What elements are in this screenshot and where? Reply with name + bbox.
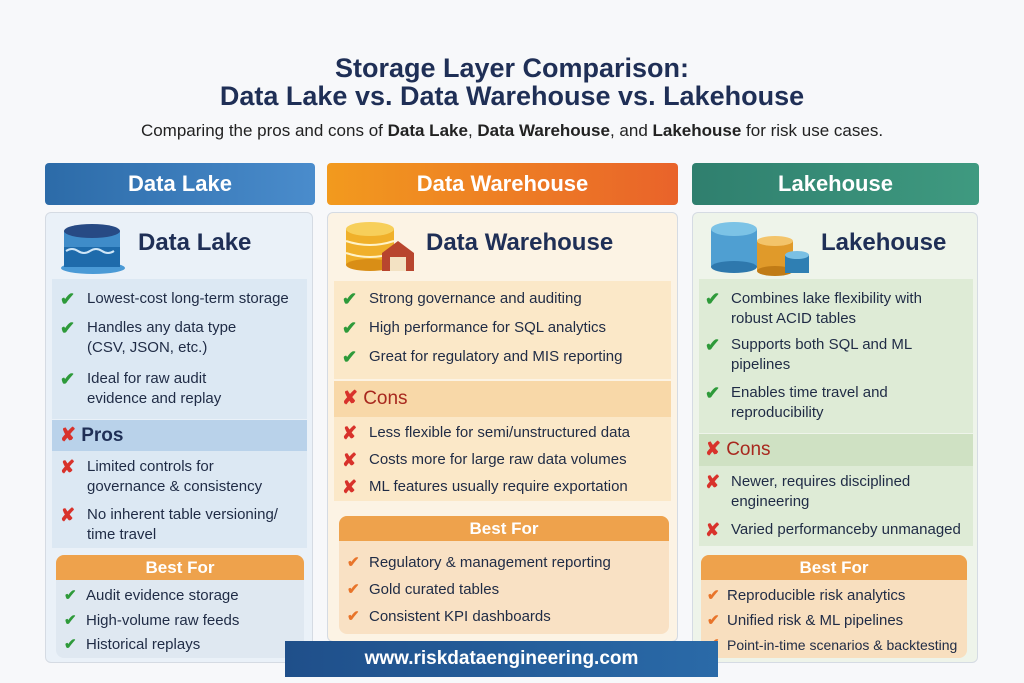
best for: Reproducible risk analytics [727,587,905,604]
pros list: Strong governance and auditing [369,290,582,307]
pros list: ✔ [705,335,720,355]
best for: Consistent KPI dashboards [369,608,551,625]
best for: Unified risk & ML pipelines [727,612,903,629]
pros list: Ideal for raw audit [87,370,206,387]
pros list: ✔ [342,318,357,338]
cons header: ✘ Cons [342,388,408,409]
pros list: ✔ [705,383,720,403]
icon: lake cylinder [61,224,125,274]
header: data lake [45,163,315,205]
pros list: evidence and replay [87,390,221,407]
pros list: High performance for SQL analytics [369,319,606,336]
cons list: engineering [731,493,809,510]
cons list: Limited controls for [87,458,214,475]
cons list: ✘ [342,450,357,470]
cons list: Newer, requires disciplined [731,473,910,490]
best for: ✔ [64,636,77,653]
cons list: ✘ [342,423,357,443]
best for: ✔ [347,581,360,598]
icon: warehouse db [346,222,414,271]
panel title: Lakehouse [821,229,946,256]
pros list: Great for regulatory and MIS reporting [369,348,622,365]
cons list: ✘ [705,472,720,492]
footer url: www.riskdataengineering.com [365,648,638,669]
best for [701,555,967,658]
cons list: Costs more for large raw data volumes [369,451,627,468]
panel: data lake [45,212,313,663]
cons list: governance & consistency [87,478,262,495]
pros list: reproducibility [731,404,824,421]
best for: ✔ [64,587,77,604]
best for: Gold curated tables [369,581,499,598]
header: data warehouse [327,163,678,205]
pros list: pipelines [731,356,790,373]
best for [56,555,304,658]
cons list: Varied performanceby unmanaged [731,521,961,538]
panel: lakehouse [692,212,978,663]
pros list: ✔ [342,289,357,309]
best for: Point-in-time scenarios & backtesting [727,637,957,653]
best for: ✔ [707,587,720,604]
best for: High-volume raw feeds [86,612,239,629]
best for: ✔ [347,554,360,571]
best for: ✔ [707,612,720,629]
panel: data warehouse [327,212,678,642]
best for [339,516,669,634]
cons list: Less flexible for semi/unstructured data [369,424,630,441]
cons list: ✘ [60,457,75,477]
best for: Best For [800,558,868,577]
subtitle: Comparing the pros and cons of Data Lake, Data Warehouse, and Lakehouse for risk use cases. [141,121,883,140]
pros list: ✔ [705,289,720,309]
best for: ✔ [347,608,360,625]
header: lakehouse: Lakehouse [778,171,893,196]
pros list: ✔ [60,318,75,338]
cons list [52,451,307,548]
pros list: Handles any data type [87,319,236,336]
pros list: Lowest-cost long-term storage [87,290,289,307]
cons list: ✘ [342,477,357,497]
best for: ✔ [707,636,720,653]
pros list: ✔ [342,347,357,367]
icon: lakehouse dbs [711,222,809,276]
footer url [285,641,718,677]
pros list: Supports both SQL and ML [731,336,912,353]
header: data warehouse: Data Warehouse [417,171,588,196]
title: Storage Layer Comparison: [335,53,689,83]
cons list: ✘ [705,520,720,540]
cons list [334,417,671,501]
pros list: robust ACID tables [731,310,856,327]
best for: ✔ [64,612,77,629]
cons list [699,466,973,546]
title [220,53,804,111]
title: Data Lake vs. Data Warehouse vs. Lakehouse [220,81,804,111]
cons header [699,434,973,466]
header: lakehouse [692,163,979,205]
cons list: time travel [87,526,156,543]
pros list: Enables time travel and [731,384,888,401]
cons header: ✘ Cons [705,439,771,460]
pros list: ✔ [60,289,75,309]
cons header [334,381,671,417]
cons header [52,420,307,451]
cons list: ML features usually require exportation [369,478,628,495]
pros list [699,279,973,433]
pros list [334,281,671,379]
cons list: ✘ [60,505,75,525]
best for: Best For [146,558,214,577]
best for: Best For [470,519,538,538]
pros list [52,279,307,419]
header: data lake: Data Lake [128,171,232,196]
pros list: (CSV, JSON, etc.) [87,339,207,356]
pros list: ✔ [60,369,75,389]
best for: Historical replays [86,636,200,653]
pros list: Combines lake flexibility with [731,290,922,307]
panel title: Data Warehouse [426,229,613,256]
best for: Regulatory & management reporting [369,554,611,571]
cons list: No inherent table versioning/ [87,506,278,523]
panel title: Data Lake [138,229,251,256]
best for: Audit evidence storage [86,587,239,604]
cons header: ✘ Pros [60,425,123,446]
